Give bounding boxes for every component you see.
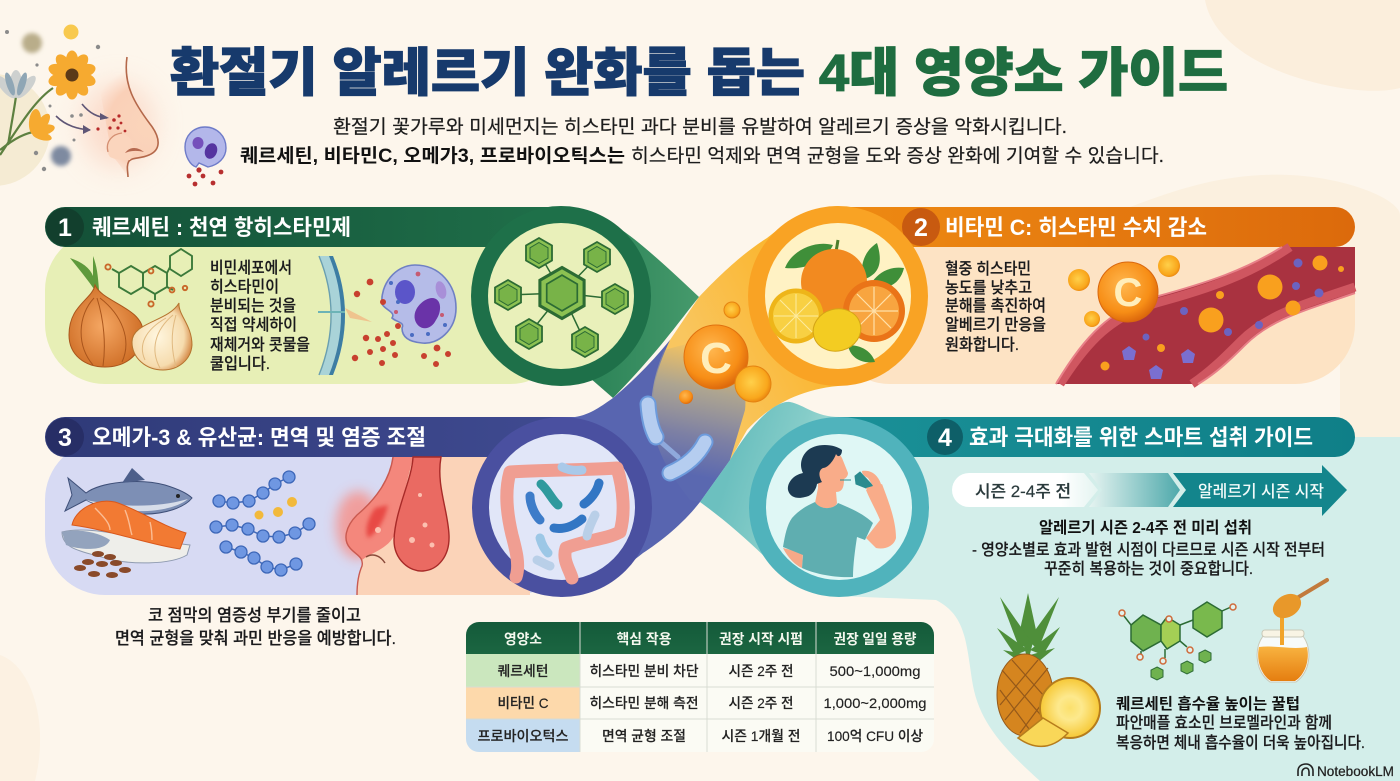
table: nutrient summary: 시즌 2주 전 xyxy=(728,695,794,711)
title: 환절기 알레르기 완화를 돕는 xyxy=(170,45,805,103)
table: nutrient summary xyxy=(466,622,934,752)
icon: quercetin molecule xyxy=(105,249,192,307)
icon: inflamed nose xyxy=(336,457,530,595)
table: nutrient summary: 영양소 xyxy=(504,631,542,647)
section 3 header: 3 xyxy=(58,424,72,452)
text: absorption tip xyxy=(1116,695,1365,752)
section 2 header xyxy=(838,207,1355,247)
ribbon: central gradient xyxy=(651,335,745,502)
text: intake timing: 꾸준히 복용하는 것이 중요합니다. xyxy=(1044,560,1253,578)
table: nutrient summary: 권장 일일 용량 xyxy=(834,631,917,647)
text: quercetin description: 비민세포에서 xyxy=(210,259,292,277)
ribbon: green xyxy=(560,207,699,398)
panel 4: smart intake guide xyxy=(749,417,1394,779)
icon: fish and salmon xyxy=(62,468,192,578)
section 2 header: 2 xyxy=(914,214,928,242)
text: intake timing xyxy=(972,519,1325,578)
text: quercetin description: 직접 약세하이 xyxy=(210,316,297,334)
icon: membrane xyxy=(318,256,372,375)
section 1 header: 퀘르세틴 : 천연 항히스타민제 xyxy=(92,215,351,240)
table: nutrient summary: 프로바이오턱스 xyxy=(478,728,569,744)
text: omega-3 description: 면역 균형을 맞춰 과민 반응을 예방합니다. xyxy=(115,629,396,648)
icon: blood vessel xyxy=(1056,247,1355,384)
woman: neck and face xyxy=(815,452,848,508)
table: nutrient summary: 시즌 2주 전 xyxy=(728,663,794,679)
icon: nose with pollen and flowers xyxy=(0,24,158,177)
icon: central vitamin C and bacteria xyxy=(648,302,771,473)
icon: onions xyxy=(69,256,192,370)
icon: pineapple xyxy=(997,593,1100,746)
icon: histamine particles xyxy=(352,279,451,367)
section 4 header xyxy=(838,417,1355,457)
ribbon: blue xyxy=(560,340,735,597)
circle: citrus fruits xyxy=(748,206,928,386)
text: intake timing: 알레르기 시즌 2-4주 전 미리 섭취 xyxy=(1039,519,1252,537)
timeline arrow xyxy=(952,465,1347,516)
text: quercetin description: 히스타민이 xyxy=(210,278,279,296)
section 3 header: 오메가-3 & 유산균: 면역 및 염증 조절 xyxy=(92,425,426,450)
table: nutrient summary: 면역 균형 조절 xyxy=(602,728,686,744)
text: quercetin description: 분비되는 것을 xyxy=(210,297,296,315)
table: nutrient summary: 시즌 1개월 전 xyxy=(722,728,800,744)
table: nutrient summary: 히스타민 분해 측전 xyxy=(590,695,698,711)
intro text: 환절기 꽃가루와 미세먼지는 히스타민 과다 분비를 유발하여 알레르기 증상을 악화시킵니다. xyxy=(333,116,1067,138)
timeline arrow: 시즌 2-4주 전 xyxy=(975,482,1071,501)
icon: vitamin C spheres: C xyxy=(1114,271,1142,315)
text: absorption tip: 복응하면 체내 흡수율이 더욱 높아집니다. xyxy=(1116,734,1365,752)
icon: vitamin C spheres xyxy=(1068,255,1180,327)
woman: near arm xyxy=(866,484,896,549)
table: nutrient summary: 100억 CFU 이상 xyxy=(827,728,923,744)
table: nutrient summary: 500~1,000mg xyxy=(830,663,920,679)
text: quercetin description: 쿨입니다. xyxy=(210,355,270,373)
circle: quercetin molecule xyxy=(471,206,651,386)
text: vitamin C description xyxy=(945,260,1046,354)
logo: NotebookLM: NotebookLM xyxy=(1317,763,1394,779)
table: nutrient summary: 권장 시작 시펌 xyxy=(719,631,803,647)
table: nutrient summary: 비타민 C xyxy=(498,695,548,711)
section 1 header: 1 xyxy=(58,214,72,242)
icon: central vitamin C and bacteria: C xyxy=(700,334,732,383)
text: omega-3 description: 코 점막의 염증성 부기를 줄이고 xyxy=(148,606,361,625)
section 4 header: 효과 극대화를 위한 스마트 섭취 가이드 xyxy=(969,425,1313,450)
intro text: 히스타민 억제와 면역 균형을 도와 증상 완화에 기여할 수 있습니다. xyxy=(631,145,1164,167)
panel 2: vitamin C xyxy=(748,206,1355,386)
text: vitamin C description: 분해를 촉진하여 xyxy=(945,297,1046,315)
intro text xyxy=(240,116,1164,167)
text: absorption tip: 퀘르세틴 흡수율 높이는 꿀텁 xyxy=(1116,695,1300,713)
icon: honey jar xyxy=(1257,580,1327,682)
icon: absorption molecule xyxy=(1119,602,1236,680)
intro text: 퀘르세틴, 비타민C, 오메가3, 프로바이오틱스는 xyxy=(240,145,625,167)
panel 1: quercetin xyxy=(45,206,651,386)
panel 3: omega-3 and probiotics xyxy=(45,417,652,648)
text: omega-3 description xyxy=(115,606,396,648)
table: nutrient summary: 1,000~2,000mg xyxy=(824,695,926,711)
woman: far arm xyxy=(783,548,803,568)
text: vitamin C description: 알베르기 만응을 xyxy=(945,316,1046,334)
text: intake timing: - 영양소별로 효과 발현 시점이 다르므로 시즌 시작 전부터 xyxy=(972,541,1325,559)
table: nutrient summary: 퀘르세턴 xyxy=(498,663,548,679)
title: 4대 영양소 가이드 xyxy=(819,45,1228,103)
text: vitamin C description: 혈중 히스타민 xyxy=(945,260,1031,278)
woman: hair xyxy=(788,445,842,498)
circle: woman taking supplement xyxy=(749,417,929,597)
section 2 header: 비타민 C: 히스타민 수치 감소 xyxy=(945,215,1207,240)
section 1 header xyxy=(45,207,561,247)
text: vitamin C description: 농도를 낮추고 xyxy=(945,279,1032,297)
table: nutrient summary: 히스타민 분비 차단 xyxy=(590,663,699,679)
text: absorption tip: 파안매플 효소민 브로멜라인과 함께 xyxy=(1116,714,1332,732)
text: vitamin C description: 원화합니다. xyxy=(945,336,1019,354)
circle: gut and probiotics xyxy=(472,417,652,597)
table: nutrient summary: 핵심 작용 xyxy=(616,631,672,647)
icon: mast cell large xyxy=(382,265,456,343)
text: quercetin description xyxy=(210,259,310,373)
section 3 header xyxy=(45,417,562,457)
text: quercetin description: 재체거와 콧물을 xyxy=(210,336,310,354)
ribbon: yellow xyxy=(653,206,838,460)
panel 4 background: teal area xyxy=(840,437,1400,781)
section 4 header: 4 xyxy=(938,424,952,452)
icon: mast cell xyxy=(185,127,226,186)
title xyxy=(170,45,1228,103)
ribbon: teal xyxy=(700,402,840,590)
icon: omega-3 chains xyxy=(210,471,315,576)
woman: shirt xyxy=(783,502,873,577)
timeline arrow: 알레르기 시즌 시작 xyxy=(1198,482,1324,501)
woman: hand and inhaler xyxy=(840,472,873,488)
